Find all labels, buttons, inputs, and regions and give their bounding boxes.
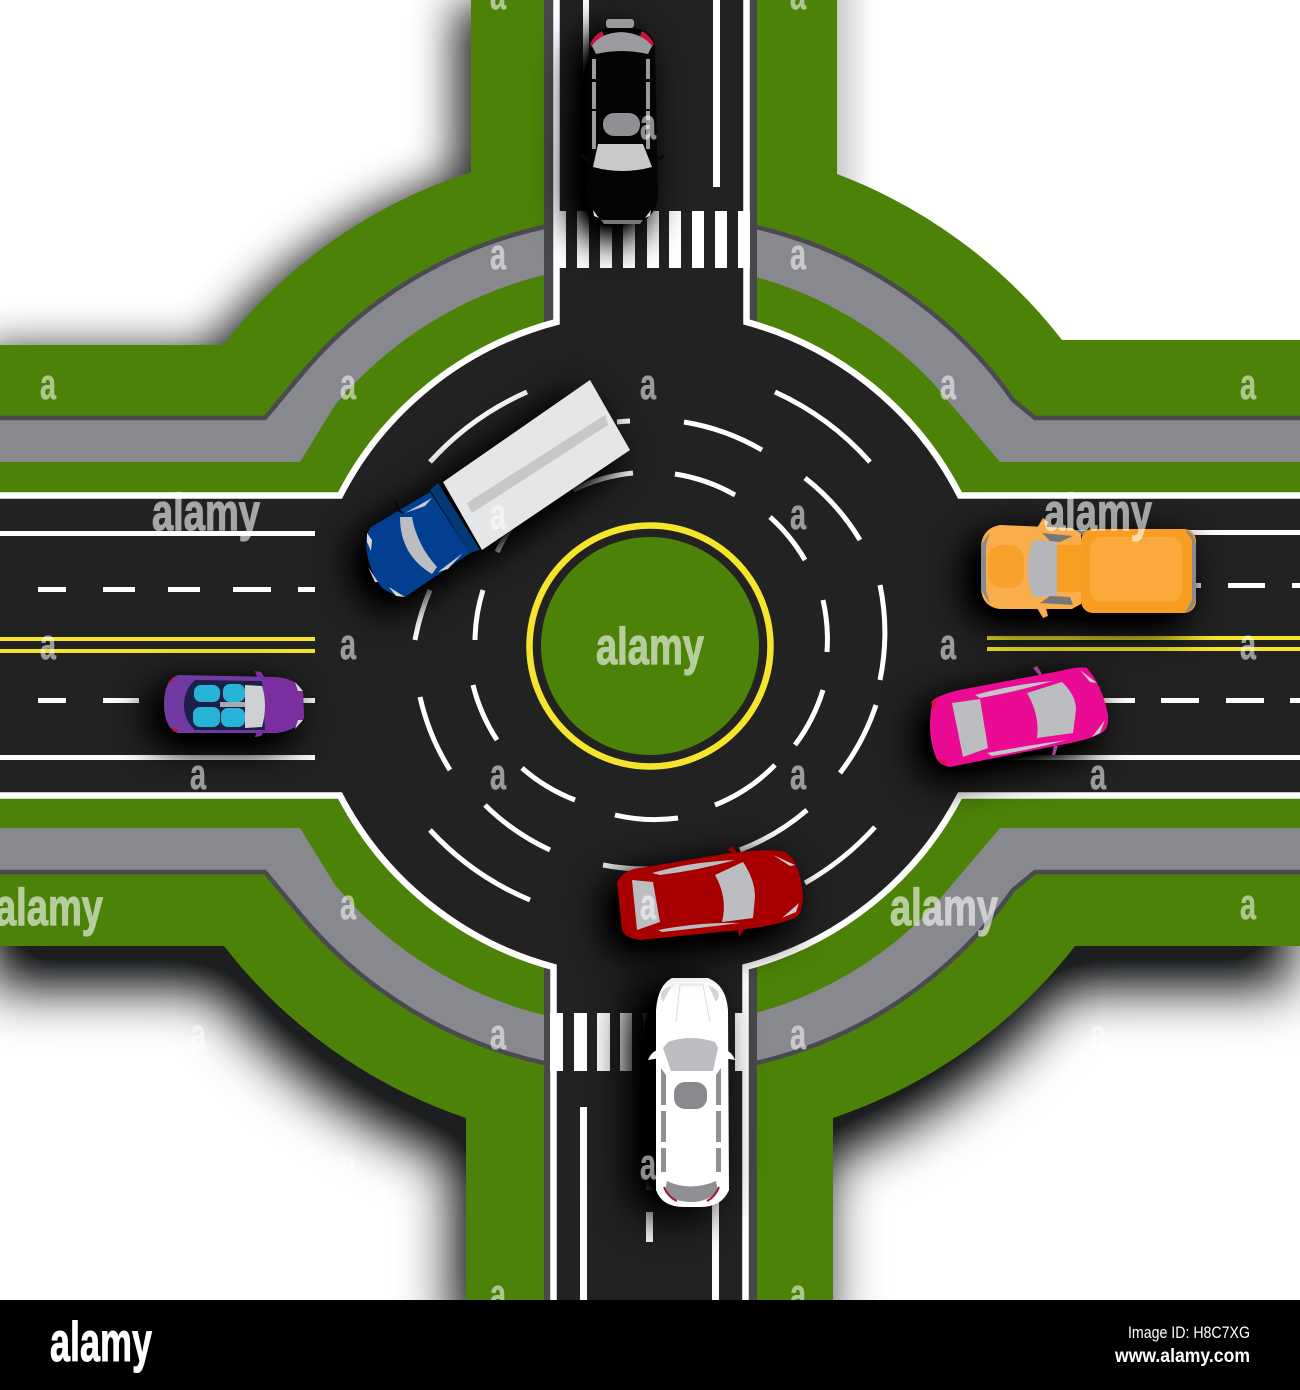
alamy large watermarks: alamy (596, 618, 704, 676)
website: www.alamy.com (1114, 1346, 1250, 1367)
alamy repeating watermark letters: a (490, 490, 506, 539)
footer bar (0, 1300, 1300, 1390)
alamy repeating watermark letters: a (190, 750, 206, 799)
footer logo: alamy (50, 1310, 152, 1373)
cargo box (443, 380, 630, 550)
pink car (930, 666, 1108, 767)
alamy repeating watermark letters: a (490, 1270, 506, 1319)
alamy repeating watermark letters: a (1240, 880, 1256, 929)
east road markings (987, 530, 1300, 760)
alamy repeating watermark letters: a (340, 620, 356, 669)
road curbs (544, 0, 757, 1300)
alamy large watermarks: alamy (1044, 484, 1152, 542)
cab (366, 483, 480, 597)
alamy large watermarks (0, 484, 1152, 937)
white car (648, 978, 735, 1207)
alamy repeating watermark letters: a (940, 1140, 956, 1189)
south road markings and crosswalk (550, 1013, 747, 1300)
alamy repeating watermark letters: a (790, 750, 806, 799)
alamy repeating watermark letters: a (640, 1140, 656, 1189)
alamy repeating watermark letters: a (640, 360, 656, 409)
alamy repeating watermark letters: a (340, 880, 356, 929)
truck cab (981, 518, 1083, 618)
west road markings (0, 531, 315, 760)
blue truck (366, 380, 630, 597)
alamy repeating watermark letters: a (340, 360, 356, 409)
alamy repeating watermark letters: a (340, 1140, 356, 1189)
alamy repeating watermark letters: a (490, 1010, 506, 1059)
alamy repeating watermark letters: a (190, 1010, 206, 1059)
purple convertible (164, 671, 304, 737)
grey ring sidewalk (0, 227, 1300, 1063)
alamy repeating watermark letters: a (490, 750, 506, 799)
alamy repeating watermark letters: a (1090, 750, 1106, 799)
central island (530, 526, 770, 766)
alamy repeating watermark letters: a (40, 620, 56, 669)
black SUV (581, 19, 664, 224)
alamy repeating watermark letters: a (790, 490, 806, 539)
alamy repeating watermark letters: a (1240, 620, 1256, 669)
alamy large watermarks: alamy (890, 879, 998, 937)
orange truck (981, 518, 1196, 618)
alamy repeating watermark letters: a (790, 1010, 806, 1059)
alamy repeating watermark letters: a (640, 100, 656, 149)
circular lane markings (415, 392, 885, 900)
alamy repeating watermark letters: a (640, 880, 656, 929)
alamy repeating watermark letters: a (40, 360, 56, 409)
image id: Image ID: H8C7XG (1128, 1323, 1250, 1342)
alamy repeating watermark letters: a (1090, 1010, 1106, 1059)
red car (617, 846, 803, 940)
alamy repeating watermark letters: a (940, 360, 956, 409)
alamy repeating watermark letters: a (940, 620, 956, 669)
alamy repeating watermark letters: a (490, 230, 506, 279)
alamy repeating watermark letters: a (1240, 360, 1256, 409)
truck cargo box (1081, 529, 1196, 613)
north road markings and crosswalk (554, 0, 750, 268)
alamy repeating watermark letters: a (790, 1270, 806, 1319)
alamy repeating watermark letters: a (790, 230, 806, 279)
alamy large watermarks: alamy (152, 484, 260, 542)
